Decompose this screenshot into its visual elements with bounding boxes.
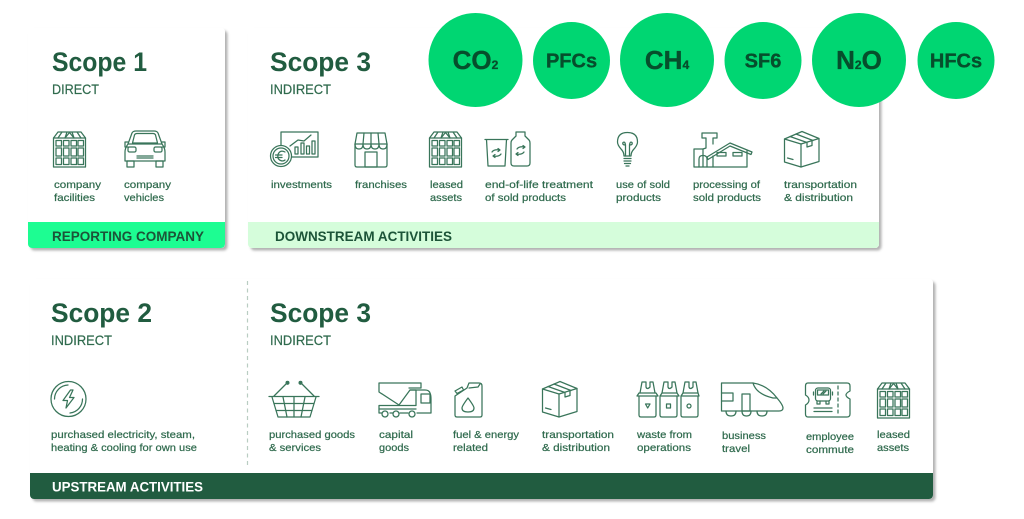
bubble: PFCs — [533, 22, 610, 99]
label: fuel and energy: fuel & energy — [453, 429, 520, 441]
label: company vehicles: company — [124, 179, 172, 191]
bubble: HFCs — [918, 22, 994, 99]
label: company vehicles: vehicles — [124, 192, 164, 204]
label: processing of sold products: sold products — [693, 192, 761, 204]
label: purchased goods: purchased goods — [269, 429, 355, 441]
bar: reporting company: REPORTING COMPANY — [52, 228, 205, 244]
bubble: CH4: CH4 — [645, 45, 689, 75]
panel: upstream Scope 2 and Scope 3 — [30, 279, 933, 499]
label: end-of-life treatment: end-of-life treatment — [485, 179, 593, 191]
label: business travel: travel — [722, 443, 750, 455]
label: transportation and distribution: transportation — [784, 179, 857, 191]
heading: Scope 3: Scope 3 — [270, 298, 371, 328]
label: employee commute: employee — [806, 431, 854, 443]
icon: basket — [269, 381, 319, 417]
label: processing of sold products: processing of — [693, 179, 760, 191]
icon: commute ticket — [806, 383, 850, 417]
icon: leased assets — [430, 132, 462, 167]
icon: waste bins — [637, 382, 699, 417]
label: franchises: franchises — [355, 179, 407, 191]
bar: reporting company — [28, 222, 225, 248]
label: transportation and distribution: & distribution — [542, 442, 610, 454]
label: leased assets: leased — [430, 179, 463, 191]
subheading: indirect: INDIRECT — [270, 81, 331, 97]
panel: Scope 3 downstream activities — [248, 28, 879, 248]
label: leased assets: leased — [877, 429, 910, 441]
label: investments: investments — [271, 179, 332, 191]
label: transportation and distribution: & distribution — [784, 192, 853, 204]
label: transportation and distribution: transportation — [542, 429, 614, 441]
icon: leased assets — [878, 383, 910, 418]
icon: train — [722, 383, 783, 416]
heading: Scope 1: Scope 1 — [52, 47, 147, 77]
bubble: N2O — [812, 13, 906, 107]
bar: upstream activities — [30, 473, 933, 499]
panel: Scope 1 reporting company — [28, 28, 225, 248]
icon: recycled bin and bottle — [485, 132, 530, 166]
bubble: CO2 — [428, 13, 522, 107]
icon: electricity — [51, 382, 86, 416]
bubble: SF6: SF6 — [745, 50, 781, 72]
label: employee commute: commute — [806, 444, 854, 456]
label: use of sold products: use of sold — [616, 179, 670, 191]
label: waste from operations: waste from — [636, 429, 692, 441]
icon: factory — [694, 133, 752, 167]
label: capital goods: capital — [379, 429, 413, 441]
bubble: SF6 — [724, 22, 802, 99]
bubble: CH4 — [620, 13, 714, 107]
icon: company vehicles — [125, 131, 165, 167]
icon: investments — [270, 132, 318, 166]
label: purchased electricity: heating & cooling for own use — [51, 442, 197, 454]
icon: franchises — [355, 133, 387, 167]
label: waste from operations: operations — [637, 442, 691, 454]
label: leased assets: assets — [877, 442, 909, 454]
bubble: CO2: CO2 — [453, 45, 499, 75]
heading: Scope 2: Scope 2 — [51, 298, 152, 328]
gas bubbles row — [428, 13, 994, 107]
icon: light bulb — [618, 132, 638, 166]
bubble: N2O: N2O — [836, 45, 882, 75]
bar: downstream activities — [248, 222, 879, 248]
label: purchased goods: & services — [269, 442, 321, 454]
bubble: HFCs: HFCs — [930, 50, 982, 72]
subheading: indirect: INDIRECT — [270, 332, 331, 348]
bar: upstream activities: UPSTREAM ACTIVITIES — [52, 478, 203, 494]
icon: fuel can — [455, 383, 482, 417]
label: company facilities: company — [54, 179, 102, 191]
icon: box — [784, 132, 819, 167]
icon: truck — [379, 383, 431, 417]
subheading: direct: DIRECT — [52, 81, 99, 97]
label: purchased electricity: purchased electricity, steam, — [51, 429, 195, 441]
label: use of sold products: products — [616, 192, 661, 204]
bar: downstream activities: DOWNSTREAM ACTIVITIES — [275, 228, 452, 244]
label: end-of-life treatment: of sold products — [485, 192, 566, 204]
label: leased assets: assets — [430, 192, 462, 204]
label: business travel: business — [722, 430, 766, 442]
heading: Scope 3: Scope 3 — [270, 47, 371, 77]
bubble: PFCs: PFCs — [546, 50, 597, 72]
subheading: indirect: INDIRECT — [51, 332, 112, 348]
icon: company facilities — [54, 132, 86, 167]
label: company facilities: facilities — [54, 192, 95, 204]
label: capital goods: goods — [379, 442, 409, 454]
label: fuel and energy: related — [453, 442, 488, 454]
icon: box — [542, 382, 577, 417]
